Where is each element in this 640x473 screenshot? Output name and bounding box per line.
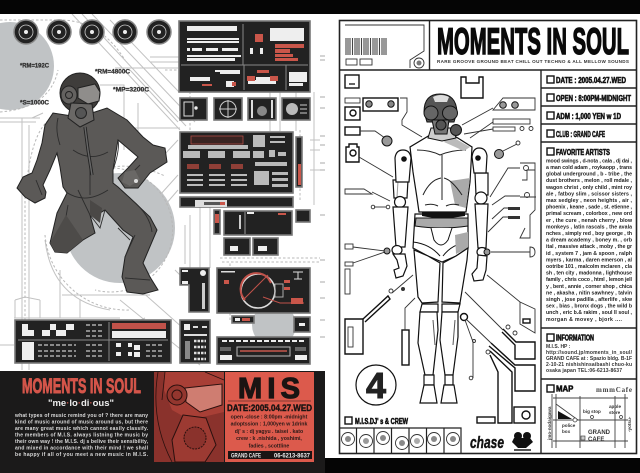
action figure anatomy <box>392 94 488 403</box>
background circuit lines <box>0 14 320 370</box>
information block: INFORMATION <box>556 334 594 342</box>
favorite artists block: a man cold adam , roykaopp , trans <box>546 165 632 171</box>
panel: black flyer footer <box>0 371 325 473</box>
red info panel: dj' s : dj yagyu . taisei . kato <box>235 429 303 435</box>
red info panel: open -close : 8:00pm -midnight <box>231 414 308 420</box>
footer paragraph: kind of music around of music around us, but there <box>15 420 148 426</box>
favorite artists block: family , chris coco , html , lemon jell <box>546 277 633 283</box>
footer paragraph <box>14 413 149 458</box>
control panel 1 <box>179 21 310 92</box>
map: GRAND <box>588 430 611 436</box>
favorite artists block: global underground , b - tribe , the <box>546 172 632 178</box>
information block: 2-10-21 nishishinsaibashi chuo-ku <box>546 362 632 368</box>
red info panel <box>225 372 314 462</box>
footer paragraph: are many great music which cannot easily classify. <box>15 426 149 432</box>
favorite artists block <box>545 148 633 323</box>
favorite artists block: morgan & movey , bjork .... <box>546 317 623 323</box>
left leg <box>414 250 440 303</box>
favorite artists block: singh , jose padilla , afterlife , skw <box>546 297 633 303</box>
map: box <box>562 429 571 434</box>
body and limbs <box>17 108 167 294</box>
map: mmmCafe <box>596 386 632 394</box>
right leg <box>442 248 468 303</box>
header dividers <box>339 20 637 453</box>
favorite artists block: a dream academy , boney m. , orb <box>546 238 632 244</box>
bottom rack panel right <box>217 337 310 364</box>
control panel 2 <box>180 132 302 193</box>
radar panel <box>217 268 310 313</box>
slider strip <box>180 197 293 207</box>
favorite artists block: FAVORITE ARTISTS <box>556 148 610 157</box>
number 4 badge: 4 <box>366 365 386 406</box>
footer paragraph: and mixed in accordance with their mind ! we shall <box>15 446 149 452</box>
small offset marks at page edge <box>320 56 325 337</box>
helmet and mask <box>60 73 100 113</box>
favorite artists block: myers , karma , daren emerson , al <box>546 257 633 263</box>
favorite artists block: er , the cure , nenah cherry , blow <box>546 218 633 224</box>
control panel 3 cluster <box>214 210 310 255</box>
map: police <box>562 423 576 428</box>
favorite artists block: nches , simply red , boy george , th <box>546 231 632 237</box>
map: MAP <box>556 384 573 394</box>
number 4 badge <box>356 365 396 406</box>
map: -yotsu- <box>627 416 632 432</box>
favorite artists block: unch , eric b.& rakim , soul II soul , <box>546 310 633 316</box>
schematic parts: left side <box>345 75 422 365</box>
favorite artists block: max sedgley , neon heights , air , <box>546 198 633 204</box>
event info rows: CLUB : GRAND CAFE <box>556 130 605 139</box>
footer paragraph: what types of music remind you of ? there are many <box>14 413 148 419</box>
event info rows: ADM : 1,000 YEN w 1D <box>556 112 621 121</box>
favorite artists block: ootribe 101 , malcolm mclaren , cla <box>546 264 632 270</box>
map: jmo-nodaigawa <box>547 406 552 441</box>
tall i-shaped module <box>180 268 209 312</box>
footer paragraph: be happy if all of you meet a new music in M.I.S. <box>15 452 149 458</box>
footer paragraph: their own way ! the M.I.S. dj s belive their sensibility, <box>15 439 149 445</box>
favorite artists block: phoenix , keane , sade , st. etienne , <box>546 205 633 211</box>
red info panel: DATE:2005.04.27.WED <box>227 403 312 414</box>
bottom right black band <box>325 458 640 473</box>
barcode tag <box>345 25 424 68</box>
map: store <box>609 410 621 415</box>
favorite artists block: dust brothers , melon , roll mdale , <box>546 178 633 184</box>
schematic parts: right side <box>460 77 536 423</box>
favorite artists block: sh , ten city , madonna , lighthouse <box>546 271 632 277</box>
information block: GRAND CAFE at : Spazio bldg. B-1F <box>546 356 632 362</box>
gas-masked crouching figure <box>17 73 167 294</box>
map: CAFE <box>588 437 604 443</box>
information block: M.I.S. HP : <box>546 344 571 350</box>
favorite artists block: monkeys , latin rascals , the avala <box>546 224 632 230</box>
red info panel: GRAND CAFE <box>231 452 261 460</box>
footer paragraph: the members of M.I.S. always listning the music by <box>15 432 148 438</box>
footer title: MOMENTS IN SOUL <box>22 374 141 398</box>
information block: http://sound.jp/moments_in_soul/ <box>546 350 633 356</box>
favorite artists block: wagon christ , only child , mint roy <box>545 185 632 191</box>
spec labels: *RM=192C <box>20 62 49 70</box>
spec labels: *RM=4800C <box>95 68 130 76</box>
spec labels <box>20 62 149 106</box>
torso <box>410 135 472 212</box>
small indicators <box>232 316 310 332</box>
red info panel: fadies , scottline <box>249 444 289 450</box>
red info panel: adoptssion : 1,000yen w 1drink <box>231 422 307 428</box>
favorite artists block: id , system 7 , jam & spoon , ralph <box>546 251 632 257</box>
left arm <box>392 150 411 278</box>
red mask illustration <box>154 372 224 462</box>
map: apple <box>609 404 621 409</box>
breathing tube <box>85 127 92 175</box>
favorite artists block: ne , akasha , nitin sawhney , talvin <box>546 290 632 296</box>
information block <box>546 334 633 374</box>
bottom rack panel left <box>15 320 171 363</box>
right arm <box>472 148 488 281</box>
four small control modules <box>180 98 310 120</box>
muscle lines <box>36 118 152 280</box>
favorite artists block: ale , fatboy slim , scissor sisters , <box>546 191 633 197</box>
gas mask head <box>424 94 462 141</box>
crew stamps row <box>339 428 461 453</box>
favorite artists block: primal scream , colorbox , new ord <box>546 211 632 217</box>
event info rows <box>547 76 631 139</box>
favorite artists block: mood swings , d-nota , cala , dj dai , <box>546 158 633 164</box>
sponsor: chase logo: chase <box>470 433 504 452</box>
poster frame <box>340 20 636 454</box>
red info panel: crew : k .nishida , yoshimi, <box>236 436 302 442</box>
melodious word: "me·lo·di·ous" <box>48 398 114 409</box>
top black band <box>0 0 640 14</box>
information block: osaka japan TEL:06-6213-8637 <box>546 368 622 374</box>
sponsor: emblem logo <box>512 432 533 451</box>
favorite artists block: sex , bias , bronx dogs , the wild b <box>546 304 632 310</box>
favorite artists block: ital , massive attack , moby , the gr <box>546 244 632 250</box>
red info panel: 06-6213-8637 <box>274 452 310 460</box>
crew heading <box>345 417 408 426</box>
red info panel: MIS <box>238 373 300 405</box>
map <box>547 384 632 448</box>
spec labels: *MP=3200C <box>113 86 149 94</box>
spec labels: *S=1000C <box>20 100 49 106</box>
subtitle: RARE GROOVE GROUND BEAT CHILL OUT TECHNO & ALL MELLOW SOUNDS <box>437 59 629 64</box>
favorite artists block: y , bent , annie , corner shop , chica <box>546 284 632 290</box>
map: big stop <box>583 409 601 414</box>
crew heading: M.I.S.DJ' s & CREW <box>355 417 408 426</box>
briefs <box>413 214 468 262</box>
bottom rack panel middle <box>180 320 210 363</box>
dial icons row <box>14 20 171 44</box>
